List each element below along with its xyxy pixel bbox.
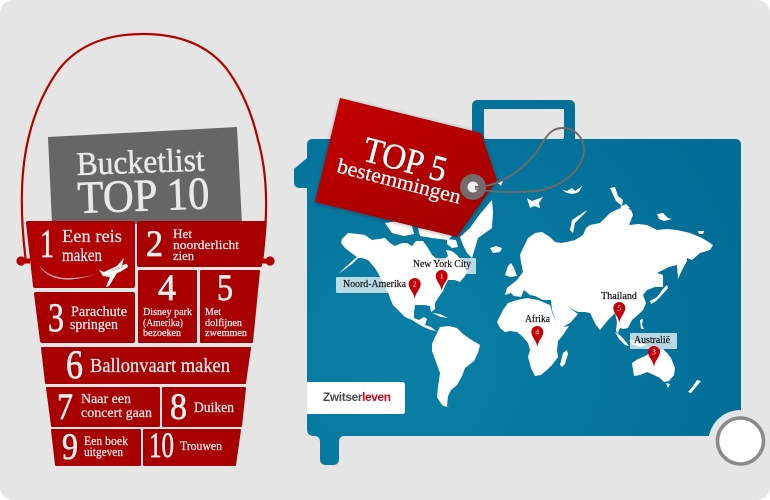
item 4: Disney park (Amerika) bezoeken: Disney park bbox=[143, 306, 192, 318]
pin 1: New York City bbox=[436, 270, 448, 291]
logo: Zwitserleven bbox=[307, 382, 405, 414]
heading sign: Bucketlist TOP 10 bbox=[48, 127, 242, 224]
item 4: Disney park (Amerika) bezoeken: bezoeken bbox=[143, 327, 181, 339]
luggage tag: TOP 5 bestemmingen: bestemmingen bbox=[335, 154, 464, 209]
panel: suitcase top 5 bbox=[294, 98, 764, 465]
item 8: Duiken: Duiken bbox=[194, 400, 234, 416]
luggage tag: TOP 5 bestemmingen: TOP 5 bbox=[359, 129, 451, 190]
pin 2: Noord-Amerika: 2 bbox=[413, 280, 417, 288]
left handle knob bbox=[16, 256, 30, 266]
pin 3: Australië bbox=[648, 346, 660, 367]
world map bbox=[338, 181, 713, 407]
label: Australië bbox=[630, 333, 677, 349]
heading sign: Bucketlist TOP 10: TOP 10 bbox=[77, 167, 210, 223]
item 10: Trouwen: Trouwen bbox=[180, 438, 222, 453]
pin 5: Thailand: 5 bbox=[617, 304, 621, 312]
item 8: Duiken bbox=[163, 387, 245, 428]
logo: Zwitserleven: Zwitserleven bbox=[323, 390, 391, 404]
item 1: Een reis maken: maken bbox=[62, 245, 102, 265]
item 2: Het noorderlicht zien: noorderlicht bbox=[173, 238, 240, 252]
item 3: Parachute springen: Parachute bbox=[71, 304, 127, 320]
pin 3: Australië: 3 bbox=[652, 348, 656, 356]
item 1: Een reis maken: 1 bbox=[40, 221, 54, 266]
item 2: Het noorderlicht zien: zien bbox=[173, 249, 195, 263]
panel: bucket top 10 bbox=[16, 34, 275, 468]
item 10: Trouwen bbox=[144, 425, 240, 465]
suitcase wheel bbox=[718, 418, 764, 464]
bucket handle bbox=[22, 34, 266, 262]
label: Thailand: Thailand bbox=[601, 291, 637, 302]
item 5: Met dolfijnen zwemmen: 5 bbox=[217, 268, 233, 309]
suitcase body bbox=[294, 100, 741, 465]
item 7: Naar een concert gaan: concert gaan bbox=[81, 406, 152, 421]
tag string bbox=[475, 128, 584, 192]
pin 2: Noord-Amerika bbox=[409, 278, 421, 299]
item 7: Naar een concert gaan: Naar een bbox=[81, 392, 131, 407]
label: New York City: New York City bbox=[413, 259, 471, 270]
item 2: Het noorderlicht zien: 2 bbox=[146, 224, 163, 265]
pin 4: Afrika: 4 bbox=[535, 328, 539, 336]
item 9: Een boek uitgeven bbox=[52, 427, 140, 468]
item 5: Met dolfijnen zwemmen: Met bbox=[205, 306, 221, 318]
item 7: Naar een concert gaan bbox=[47, 387, 159, 428]
right handle knob bbox=[261, 256, 275, 266]
label: Afrika: Afrika bbox=[525, 314, 551, 325]
icon: airplane bbox=[99, 258, 128, 287]
item 6: Ballonvaart maken: Ballonvaart maken bbox=[90, 355, 230, 377]
item 3: Parachute springen bbox=[36, 294, 133, 341]
label: Noord-Amerika bbox=[336, 277, 407, 293]
item 1: Een reis maken: Een reis bbox=[62, 226, 122, 246]
item 9: Een boek uitgeven: uitgeven bbox=[84, 444, 123, 459]
item 2: Het noorderlicht zien: Het bbox=[173, 227, 193, 241]
item 5: Met dolfijnen zwemmen bbox=[201, 268, 259, 342]
item 1: Een reis maken bbox=[28, 221, 133, 287]
item 3: Parachute springen: 3 bbox=[48, 295, 64, 340]
item 5: Met dolfijnen zwemmen: zwemmen bbox=[205, 327, 247, 339]
item 5: Met dolfijnen zwemmen: dolfijnen bbox=[205, 317, 242, 329]
label: Australië: Australië bbox=[634, 335, 671, 346]
item 2: Het noorderlicht zien bbox=[139, 223, 264, 265]
label: New York City bbox=[413, 258, 476, 274]
item 6: Ballonvaart maken: 6 bbox=[66, 342, 83, 387]
luggage tag: TOP 5 bestemmingen bbox=[315, 98, 584, 237]
swoosh bbox=[39, 265, 97, 280]
pin 4: Afrika bbox=[531, 326, 543, 347]
item 10: Trouwen: 10 bbox=[149, 425, 174, 465]
item 4: Disney park (Amerika) bezoeken: 4 bbox=[158, 268, 176, 309]
item 8: Duiken: 8 bbox=[170, 387, 187, 428]
heading sign: Bucketlist TOP 10: Bucketlist bbox=[76, 143, 205, 183]
item 4: Disney park (Amerika) bezoeken bbox=[139, 268, 196, 342]
item 6: Ballonvaart maken bbox=[42, 342, 250, 387]
tag eyelet bbox=[460, 174, 486, 200]
item 4: Disney park (Amerika) bezoeken: (Amerika) bbox=[143, 317, 183, 329]
pin 1: New York City: 1 bbox=[440, 272, 444, 280]
item 9: Een boek uitgeven: Een boek bbox=[84, 433, 128, 448]
item 3: Parachute springen: springen bbox=[70, 317, 119, 333]
pin 5: Thailand bbox=[613, 302, 625, 323]
label: Noord-Amerika: Noord-Amerika bbox=[343, 279, 407, 290]
item 7: Naar een concert gaan: 7 bbox=[57, 387, 73, 428]
item 9: Een boek uitgeven: 9 bbox=[62, 427, 78, 468]
